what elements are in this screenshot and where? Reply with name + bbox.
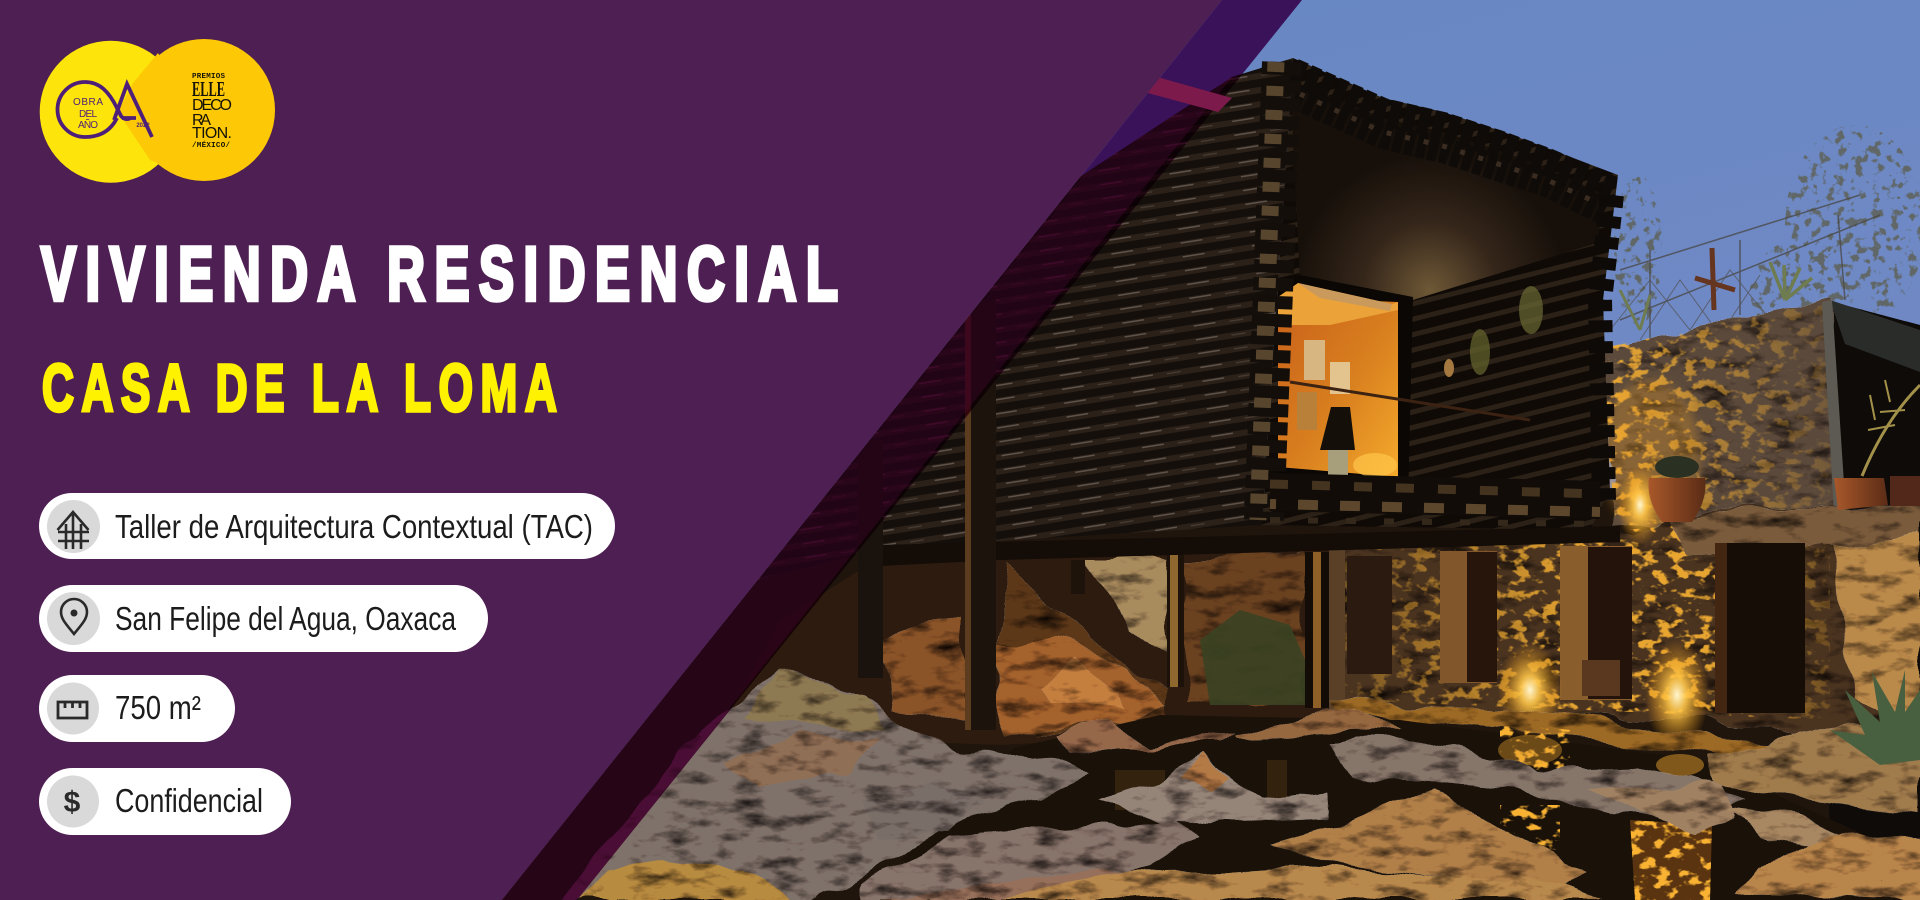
pill: area — [39, 675, 235, 742]
subtitle: CASA DE LA LOMA — [42, 352, 557, 426]
text: location: San Felipe del Agua, Oaxaca — [115, 600, 457, 637]
pill: location — [39, 585, 488, 652]
icon: house structure — [58, 512, 89, 549]
text: area: 750 m² — [115, 689, 201, 726]
house front gable — [1262, 58, 1618, 530]
lower stone wall with openings — [1340, 505, 1920, 760]
icon: dollar sign: $ — [64, 786, 81, 819]
OA wordmark: DEL — [79, 109, 97, 120]
Elle Decoration wordmark: /MÉXICO/ — [192, 141, 230, 150]
steel columns — [858, 300, 1329, 730]
pill: architect — [39, 493, 615, 559]
Elle Decoration wordmark — [192, 73, 232, 150]
terracotta pots — [1649, 456, 1920, 522]
logo overlap wedge — [118, 53, 190, 170]
dark concrete block at right — [1825, 300, 1920, 900]
house side wall of logs — [600, 58, 1293, 620]
OA wordmark: OBRA — [73, 97, 103, 108]
Elle Decoration wordmark: RA — [192, 112, 211, 129]
hill and space beneath the house — [720, 545, 1345, 745]
text: budget: Confidencial — [115, 782, 263, 819]
OA wordmark: AÑO — [78, 118, 98, 131]
reflections in pond — [1115, 722, 1712, 900]
text: architect name: Taller de Arquitectura Contextual (TAC) — [115, 508, 593, 545]
logo right circle — [133, 39, 275, 181]
log pile below window — [1270, 484, 1600, 524]
upper stone wall — [1598, 300, 1846, 530]
agave plant — [1830, 670, 1920, 765]
pond water — [900, 715, 1920, 900]
red beam behind overlay — [1144, 75, 1232, 112]
lit spots on wall — [1498, 465, 1709, 750]
stones and rocks — [560, 670, 1920, 900]
trees and fence behind the wall — [1610, 125, 1920, 345]
sky — [560, 0, 1920, 560]
icon: map pin — [61, 599, 87, 634]
photo: Casa de la Loma at dusk — [500, 0, 1920, 900]
hanging plants and log disc — [1444, 286, 1543, 377]
maroon tint over house in band — [502, 77, 1232, 900]
pill: budget — [39, 768, 291, 835]
Elle Decoration wordmark: TION. — [192, 125, 232, 142]
floor beam — [880, 526, 1620, 566]
purple background panel — [0, 0, 1222, 900]
terrace edge behind pond — [1335, 700, 1830, 765]
OA wordmark: 2022 — [136, 123, 150, 129]
lit window — [1278, 283, 1530, 477]
icon: ruler — [58, 702, 87, 718]
Elle Decoration wordmark: ELLE — [192, 77, 225, 101]
title: VIVIENDA RESIDENCIAL — [41, 231, 838, 316]
logo: Obra del Año and Premios Elle Decoration — [40, 39, 275, 183]
jagged log ends on gable edges — [1258, 62, 1612, 520]
ground base — [500, 500, 1920, 900]
logo left circle — [40, 41, 182, 183]
Elle Decoration wordmark: PREMIOS — [192, 73, 225, 81]
magenta multiply overlay band — [502, 0, 1302, 900]
window niches and door — [1347, 543, 1805, 713]
OA wordmark — [73, 97, 150, 131]
Elle Decoration wordmark: DECO — [192, 97, 232, 114]
OA monogram — [57, 82, 152, 137]
